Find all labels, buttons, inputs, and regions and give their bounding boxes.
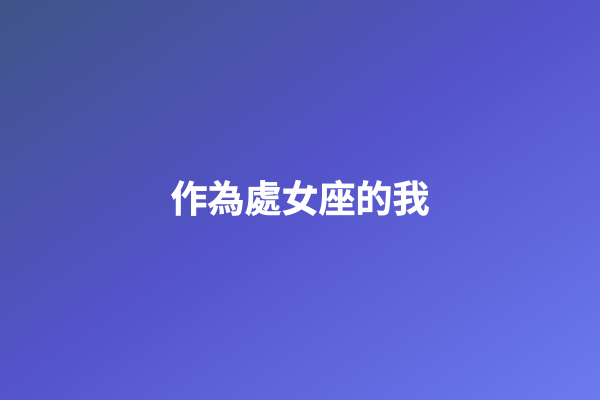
title: 作為處女座的我 <box>170 179 430 220</box>
